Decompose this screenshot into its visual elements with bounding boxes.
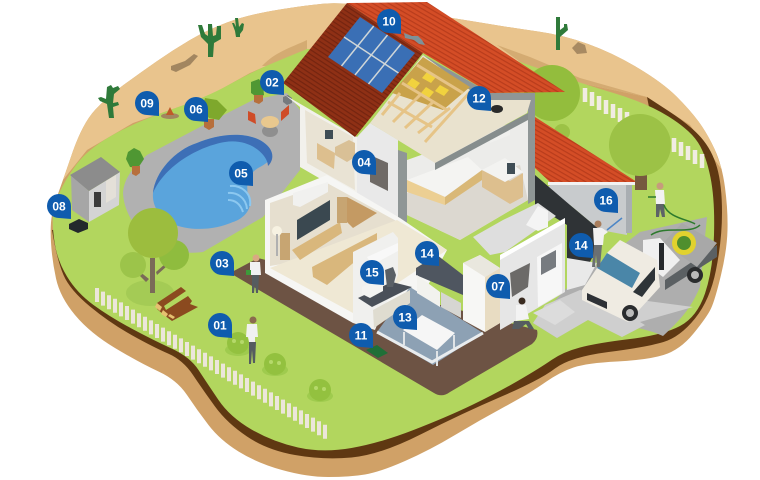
marker 12 [467, 86, 491, 111]
marker 13: 13 [398, 310, 412, 324]
marker 06: 06 [189, 102, 203, 116]
upper storey [285, 93, 535, 240]
solar panel [328, 17, 415, 93]
truck [582, 223, 717, 322]
marker 14 garage: 14 [574, 238, 588, 252]
back fence [585, 88, 702, 168]
marker 08 [47, 194, 71, 219]
dirt strip [230, 258, 537, 395]
marker 11: 11 [355, 328, 368, 342]
garage [535, 175, 632, 290]
marker 10: 10 [382, 14, 396, 28]
potted plants [126, 79, 264, 176]
garage roof [535, 117, 637, 185]
marker 08: 08 [52, 200, 66, 214]
desert sand [63, 3, 722, 180]
marker 01: 01 [213, 318, 227, 332]
marker 02 [260, 70, 284, 95]
front fence [97, 288, 325, 439]
marker 04 [352, 150, 376, 175]
workers [246, 182, 695, 364]
rat [491, 105, 503, 113]
marker 16: 16 [599, 194, 613, 208]
deck [123, 93, 300, 253]
lower storey [265, 175, 447, 323]
marker 13 [393, 305, 417, 330]
logs [155, 287, 198, 321]
marker 06 [184, 97, 208, 122]
marker 01 [208, 313, 232, 338]
main roof [283, 2, 565, 137]
marker 15: 15 [365, 266, 379, 280]
marker 09 [135, 91, 159, 116]
swimming pool [153, 135, 272, 229]
marker 02: 02 [265, 76, 279, 90]
green lawn [53, 49, 714, 450]
marker 14 garage [569, 233, 593, 258]
attic [370, 55, 535, 170]
tree right [609, 114, 671, 190]
patio table and chairs [248, 95, 292, 137]
driveway [533, 217, 707, 338]
tree left [120, 208, 189, 306]
marker 10 [377, 9, 401, 34]
bushes [225, 332, 333, 402]
tree behind roof [524, 65, 580, 140]
marker 14 kitchen: 14 [420, 246, 434, 260]
marker 07 [486, 274, 510, 299]
shed [70, 157, 120, 222]
side wing with door [473, 203, 575, 330]
soil band [52, 97, 722, 458]
marker 03: 03 [215, 256, 229, 270]
marker 03 [210, 251, 234, 276]
desert cacti and log [98, 17, 587, 118]
marker 16 [594, 188, 618, 213]
marker 07: 07 [491, 280, 505, 294]
marker 05 [229, 161, 253, 186]
marker 11 [349, 323, 373, 348]
marker 05: 05 [234, 166, 248, 180]
marker 12: 12 [472, 92, 486, 106]
marker 04: 04 [357, 156, 371, 170]
marker 14 kitchen [415, 241, 439, 266]
kitchen [353, 232, 500, 366]
marker 15 [360, 260, 384, 285]
marker 09: 09 [140, 96, 154, 110]
equipment box [69, 219, 88, 233]
birds on roof [404, 33, 425, 45]
